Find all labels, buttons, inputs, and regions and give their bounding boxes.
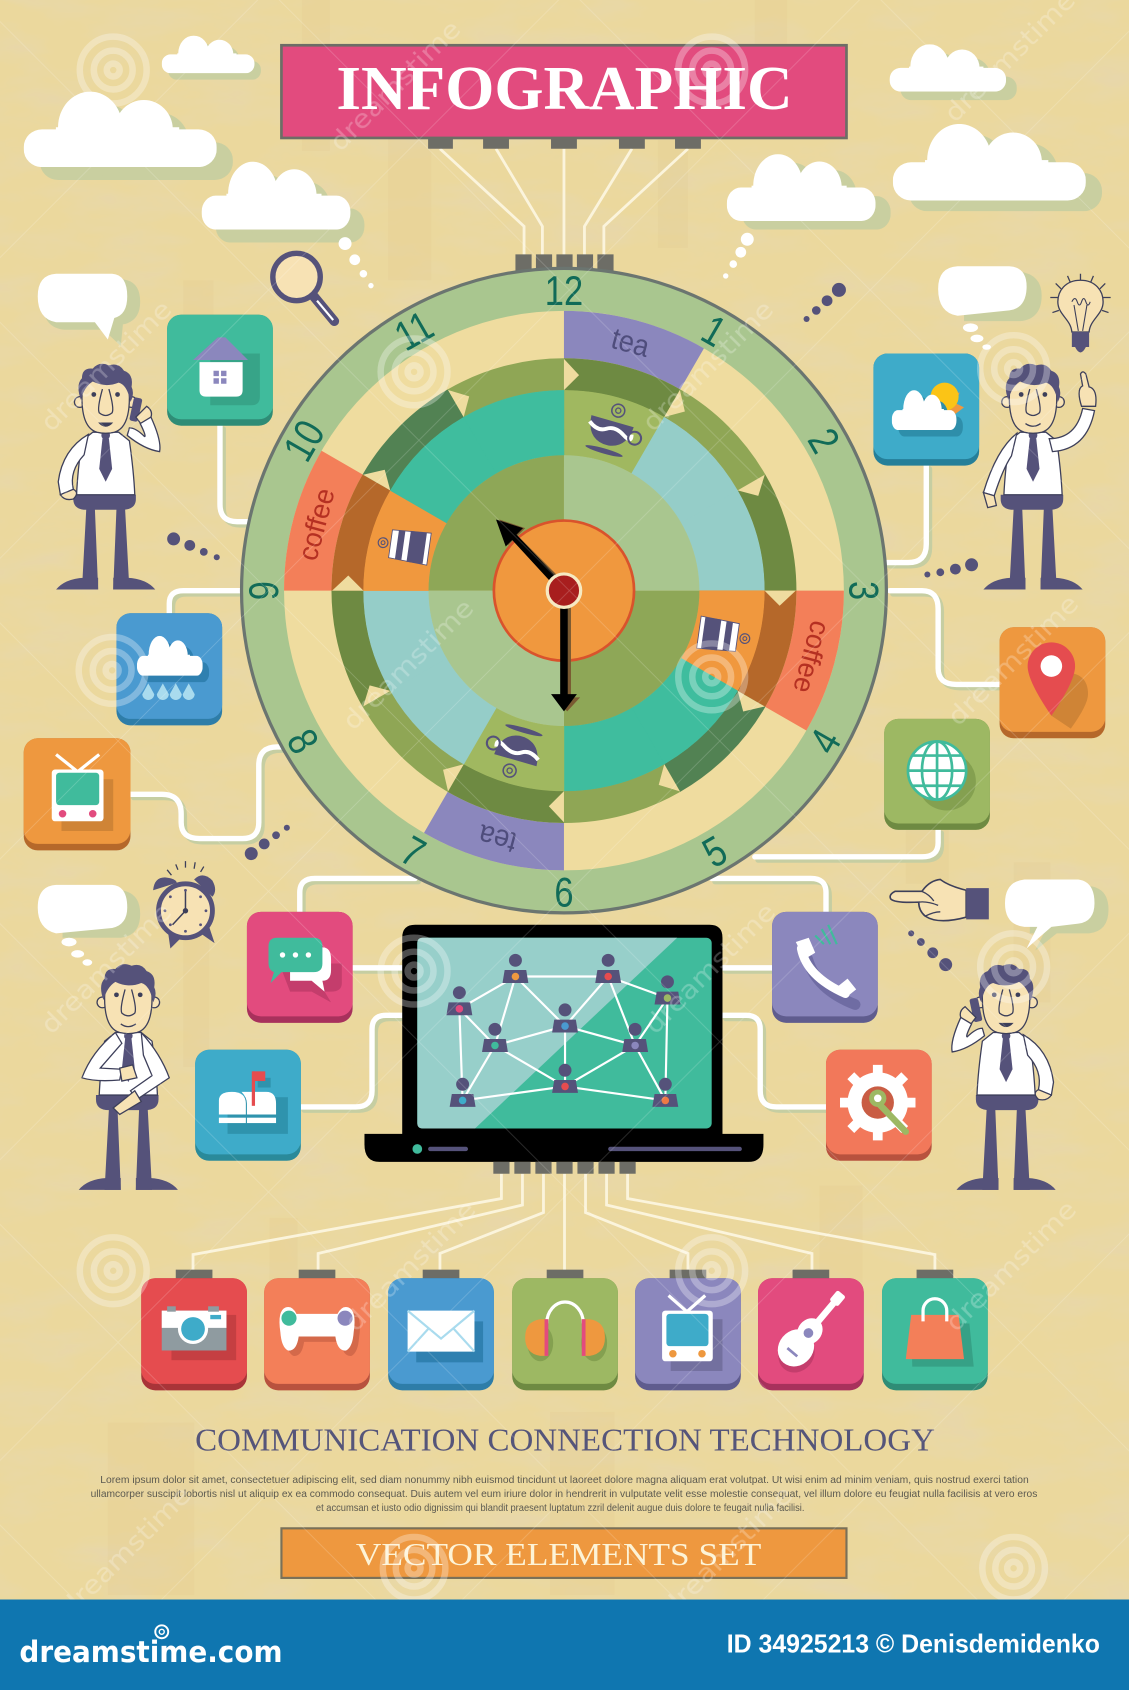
icon tile: tv purple	[635, 1270, 741, 1390]
clock hub	[494, 521, 634, 661]
bubble: top left speech	[38, 274, 140, 346]
icon tile: tv orange	[24, 738, 130, 850]
clock numbers: 12	[545, 268, 583, 315]
cloud large top right	[893, 124, 1102, 211]
subtitle: COMMUNICATION CONNECTION TECHNOLOGY	[195, 1423, 935, 1458]
cloud mid right	[727, 154, 891, 230]
watermarks: dreamstime	[324, 14, 467, 158]
clock chart	[241, 268, 887, 916]
icon tile: mailbox	[195, 1050, 301, 1161]
watermarks: dreamstime	[54, 1480, 198, 1623]
cloud small top left	[162, 36, 261, 80]
watermarks: dreamstime	[940, 1195, 1083, 1338]
watermarks: dreamstime	[35, 897, 178, 1040]
cloud small top right	[890, 44, 1017, 100]
watermarks: dreamstime	[35, 295, 178, 438]
clock numbers: 11	[387, 302, 442, 361]
bubble: bottom left thought	[38, 885, 140, 966]
bottom icon row	[141, 1270, 988, 1390]
inner quadrants	[429, 455, 699, 726]
icon tile: envelope	[388, 1270, 494, 1390]
icon tile: guitar	[758, 1270, 864, 1390]
icon tile: location pin	[1000, 627, 1105, 738]
sector labels: tea	[608, 322, 653, 364]
clock numbers: 6	[554, 869, 574, 916]
sector labels: coffee	[787, 618, 836, 696]
laptop connector tabs	[493, 1162, 636, 1174]
bubble: bottom right speech	[1005, 879, 1109, 951]
person: right bottom on phone	[952, 964, 1056, 1190]
icon tile: rain	[116, 613, 222, 725]
clock numbers: 10	[275, 413, 335, 469]
clock connector tabs	[515, 254, 614, 273]
body text: ullamcorper suscipit lobortis nisl ut aliquip ex ea commodo consequat. Duis autem vel eum iriure dolor in hendrerit in vulputate velit esse molestie consequat, vel illum dolore eu feugiat nulla facilisis at vero eros	[91, 1489, 1037, 1500]
icon: tea cup top	[582, 398, 649, 462]
icon: alarm clock	[153, 861, 215, 948]
person: left top on phone	[56, 364, 160, 590]
clock numbers	[241, 268, 887, 916]
watermarks: dreamstime	[656, 1480, 799, 1623]
cloud mid left	[202, 162, 364, 243]
sector labels: tea	[475, 817, 520, 859]
watermarks: dreamstime	[639, 897, 782, 1040]
watermarks: dreamstime	[339, 1195, 482, 1338]
icon tile: globe	[884, 719, 990, 830]
clock numbers: 5	[695, 827, 735, 877]
clock numbers: 4	[801, 722, 851, 762]
icon tile: phone	[772, 912, 878, 1023]
clock numbers: 7	[393, 827, 433, 877]
clock numbers: 9	[241, 581, 288, 600]
clock numbers: 8	[277, 722, 327, 762]
person: right top pointing up	[983, 364, 1096, 590]
clock outer ring	[242, 268, 886, 913]
title banner: INFOGRAPHIC	[336, 53, 793, 123]
network people	[446, 954, 680, 1107]
icon: magnifying glass	[273, 253, 334, 321]
footer image id: ID 34925213 © Denisdemidenko	[727, 1630, 1100, 1658]
laptop body	[402, 925, 722, 1142]
clock pin	[547, 574, 581, 607]
watermarks: dreamstime	[337, 593, 480, 736]
icon: light bulb	[1050, 274, 1111, 352]
icon: coffee cup right	[697, 616, 752, 655]
sector labels	[292, 322, 836, 859]
connector wires	[130, 149, 1003, 1272]
bottom banner	[281, 1528, 846, 1578]
body text	[91, 1475, 1037, 1514]
footer bar	[0, 1599, 1129, 1690]
icon tile: camera	[141, 1270, 247, 1390]
laptop with network	[364, 925, 763, 1174]
bottom banner: VECTOR ELEMENTS SET	[356, 1537, 761, 1572]
direction arrows	[332, 359, 796, 822]
clock numbers: 1	[694, 306, 734, 357]
icon tile: gamepad	[264, 1270, 370, 1390]
icon tile: gear	[826, 1050, 932, 1161]
watermarks: dreamstime	[637, 295, 780, 438]
clouds	[24, 36, 1102, 243]
footer brand: dreamstime.com	[19, 1635, 283, 1669]
bubble: top right thought	[938, 266, 1042, 350]
network links	[459, 976, 667, 1100]
icon: coffee cup left	[376, 526, 431, 565]
clock numbers: 3	[840, 581, 887, 600]
icon tile: shopping bag	[882, 1270, 988, 1390]
watermarks: dreamstime	[942, 589, 1085, 732]
clock numbers: 2	[798, 421, 848, 461]
body text: Lorem ipsum dolor sit amet, consectetuer adipiscing elit, sed diam nonummy nibh euismod tincidunt ut laoreet dolore magna aliquam erat volutpat. Ut wisi enim ad minim veniam, quis nostrud exerci tation	[100, 1475, 1029, 1486]
arrow ring segments	[305, 331, 823, 850]
tea and coffee label sectors	[284, 311, 844, 870]
icon tile: weather	[873, 354, 979, 466]
thought dots from clouds	[339, 233, 754, 288]
cloud large top left	[24, 92, 233, 180]
icon: tea cup bottom	[479, 719, 546, 784]
sector labels: coffee	[292, 485, 341, 564]
clock hands	[496, 520, 580, 711]
title banner	[281, 45, 846, 149]
body text: et accumsan et iusto odio dignissim qui blandit praesent luptatum zzril delenit augue duis dolore te feugait nulla facilisi.	[316, 1503, 804, 1514]
icon: pointing hand	[890, 879, 989, 921]
icon tile: house	[167, 315, 273, 426]
watermarks: dreamstime	[939, 0, 1082, 128]
middle ring segments	[340, 367, 788, 814]
person: left bottom checking watch	[79, 964, 178, 1190]
dark dot trails	[167, 283, 978, 971]
icon tile: headphones	[512, 1270, 618, 1390]
icon tile: chat	[247, 912, 353, 1023]
